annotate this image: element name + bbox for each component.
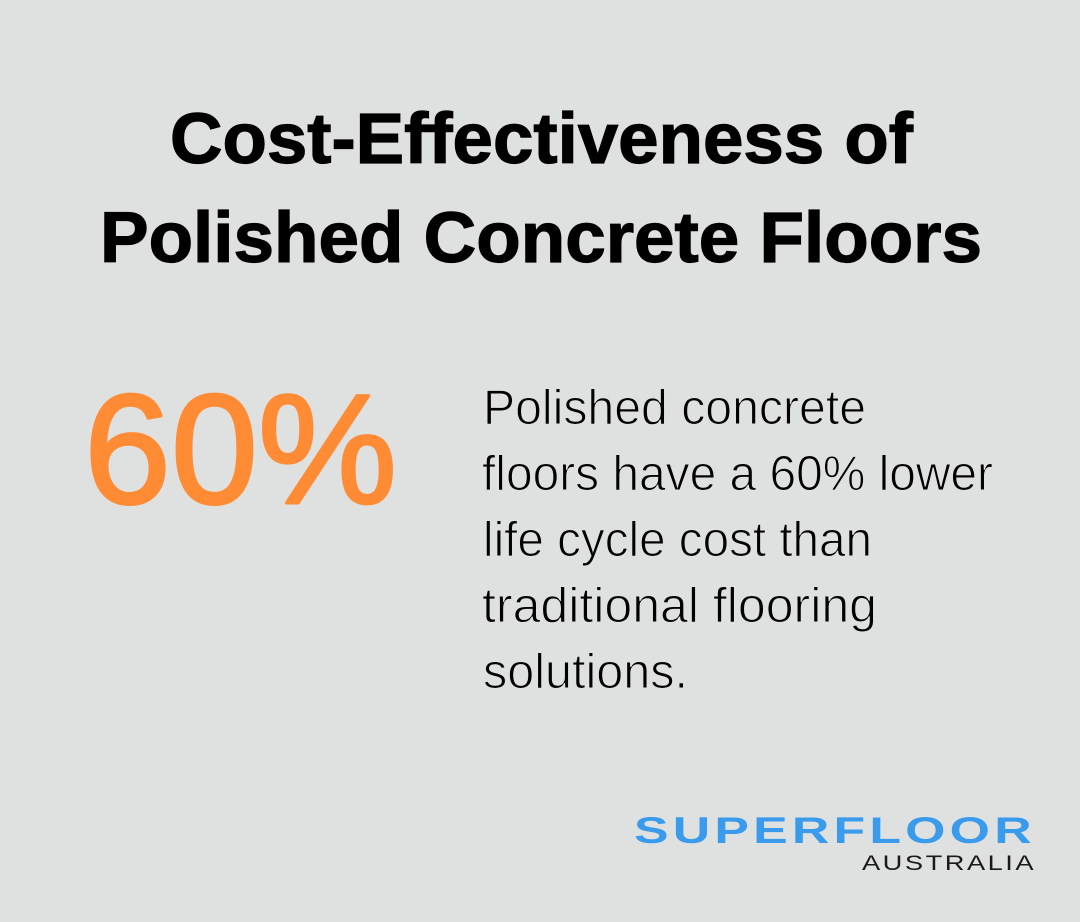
big statistic: 60%: 60% [84, 363, 397, 537]
description text block: floors have a 60% lower [482, 447, 993, 501]
description text block: traditional flooring [482, 579, 877, 633]
title: Cost-Effectiveness of [170, 100, 913, 179]
description text block: Polished concrete [483, 381, 866, 435]
title [100, 100, 982, 278]
logo: Superfloor Australia [634, 809, 1034, 875]
title: Polished Concrete Floors [100, 199, 982, 278]
description text block: solutions. [483, 645, 688, 699]
logo subtitle: AUSTRALIA [862, 852, 1034, 875]
description text block [482, 381, 993, 699]
description text block: life cycle cost than [483, 513, 872, 567]
logo wordmark: SUPERFLOOR [634, 809, 1032, 851]
